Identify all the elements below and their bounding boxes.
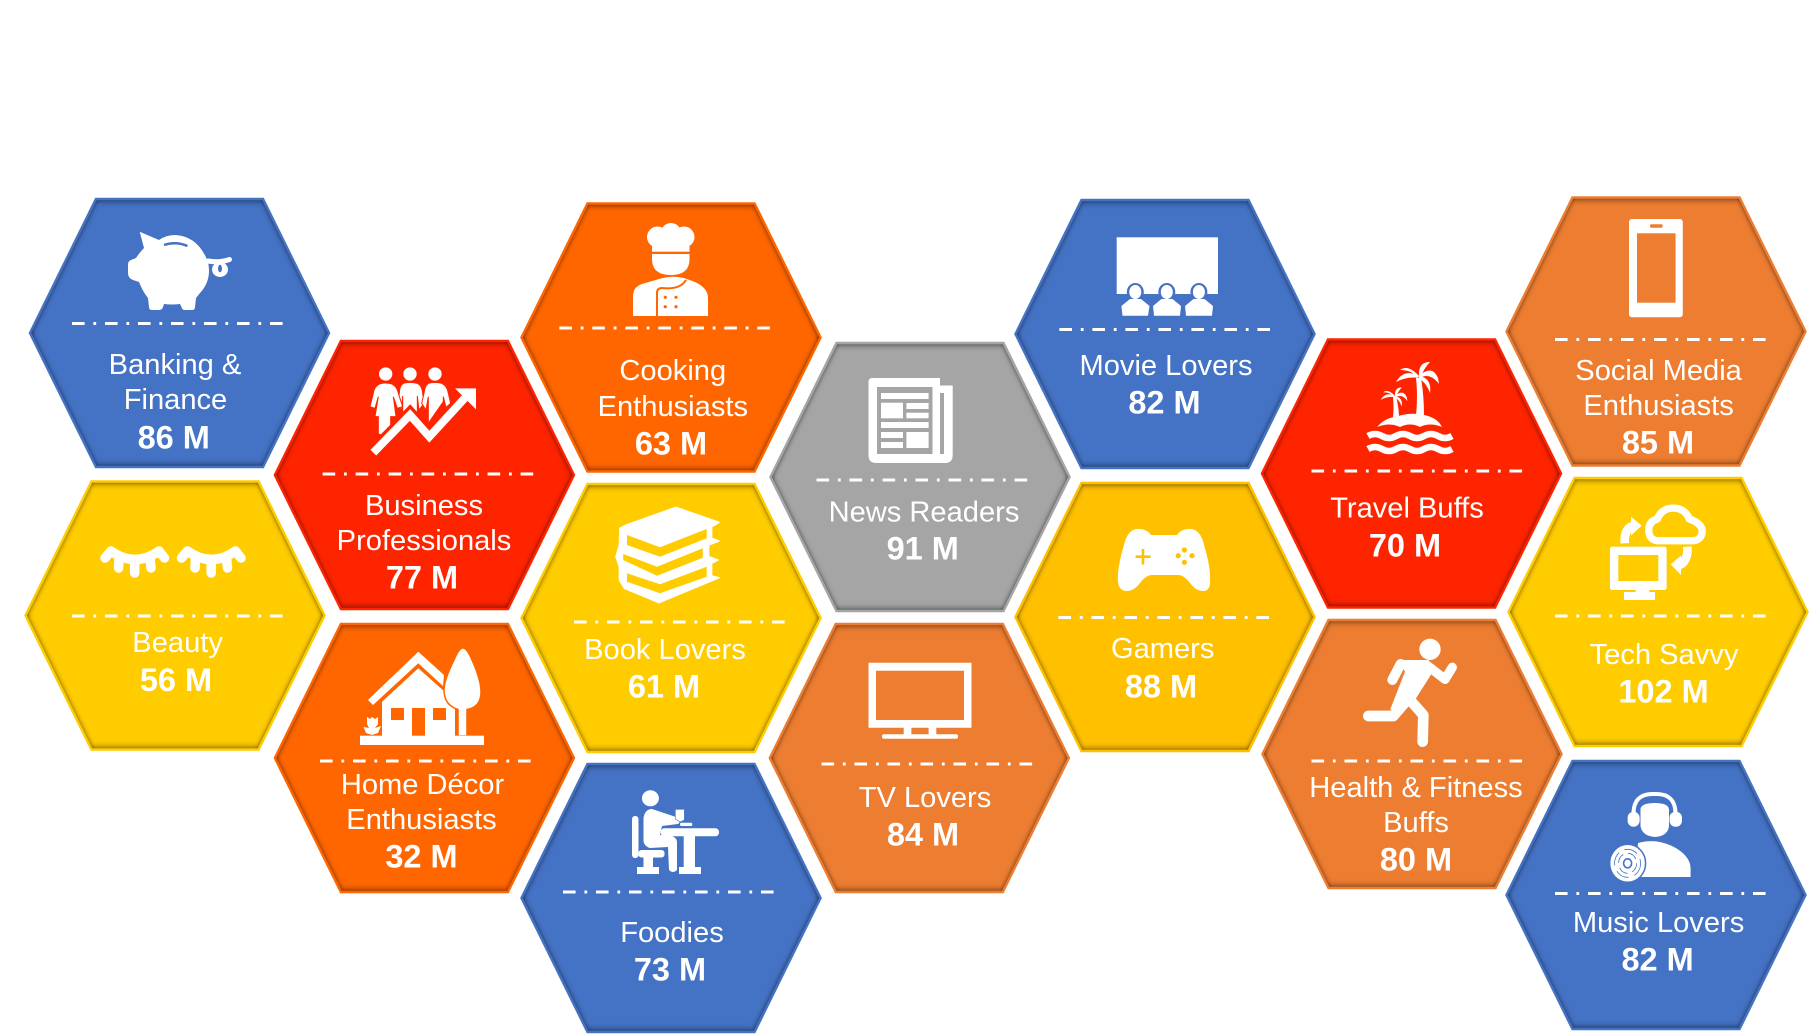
panel: Banking & Finance [30,199,329,467]
icon: piggy bank [128,232,230,310]
icon: newspaper [868,378,953,463]
value: 102 M [1618,674,1709,710]
icon: people with rising arrow [370,367,476,453]
panel: Music Lovers [1506,761,1806,1029]
label: Travel Buffs [1330,492,1484,524]
label: Beauty [132,627,223,659]
panel: Gamers [1016,483,1314,751]
label: Cooking [619,355,726,387]
value: 86 M [138,420,210,456]
hexagon: grey [770,343,1070,611]
panel: News Readers [770,343,1070,611]
panel: TV Lovers [770,624,1069,892]
panel: Health & Fitness Buffs [1262,620,1562,888]
value: 61 M [628,668,700,704]
hexagon: light orange [1262,620,1562,888]
hexagon: amber [1016,483,1314,751]
label line 2: Finance [124,384,227,416]
label: News Readers [829,497,1019,529]
icon: runner [1368,639,1452,742]
hexagon: orange [522,204,820,472]
value: 85 M [1622,424,1694,460]
label: Music Lovers [1573,907,1744,939]
panel: Book Lovers [522,484,820,752]
panel: Tech Savvy [1508,478,1808,746]
label line 2: Enthusiasts [598,391,748,423]
label: TV Lovers [859,782,991,814]
label: Book Lovers [584,634,746,666]
panel: Business Professionals [275,341,574,609]
value: 84 M [887,816,959,852]
hexagon: orange [275,624,574,892]
value: 63 M [635,426,707,462]
hexagon: red [1262,340,1561,608]
icon: chef [633,223,708,316]
panel: Social Media Enthusiasts [1506,198,1806,466]
icon: computer and cloud sync [1610,508,1702,600]
label: Tech Savvy [1590,639,1739,671]
value: 73 M [634,952,706,988]
panel: Cooking Enthusiasts [522,204,820,472]
icon: smartphone [1629,219,1683,317]
panel: Beauty [26,482,324,750]
hexagon: yellow [522,484,820,752]
hexagon: light orange [1506,198,1806,466]
panel: Home Decor Enthusiasts [275,624,574,892]
hexagon: blue [1016,200,1314,468]
hexagon: blue [522,764,820,1032]
hexagon: red [275,341,574,609]
label: Social Media [1575,355,1743,387]
hexagon: blue [30,199,329,467]
label: Business [365,490,483,522]
hexagon: light orange [770,624,1069,892]
hexagon: yellow [1508,478,1808,746]
icon: listener with headphones and record [1610,794,1691,882]
label line 2: Professionals [337,525,511,557]
value: 82 M [1128,384,1201,420]
value: 91 M [887,530,959,566]
value: 82 M [1621,942,1694,978]
label: Foodies [620,917,724,949]
label: Health & Fitness [1309,772,1523,804]
hexagon: yellow [26,482,324,750]
icon: stack of books [616,507,719,603]
icon: person at table [632,790,719,874]
icon: palm island [1368,362,1452,451]
value: 88 M [1125,668,1197,704]
label: Gamers [1111,633,1214,665]
value: 77 M [386,560,458,596]
hexagon: blue [1506,761,1806,1029]
label line 2: Enthusiasts [346,804,497,836]
icon: game controller [1118,529,1210,591]
value: 70 M [1369,528,1441,564]
icon: television [868,663,972,739]
panel: Movie Lovers [1016,200,1314,468]
panel: Travel Buffs [1262,340,1561,608]
label: Banking & [109,349,241,381]
value: 56 M [140,662,212,698]
label: Home Décor [341,769,504,801]
icon: cinema screen and audience [1117,237,1218,316]
label line 2: Enthusiasts [1583,390,1734,422]
value: 32 M [385,838,458,874]
icon: house and tree [360,648,484,745]
icon: eyelashes [105,551,241,573]
label line 2: Buffs [1383,807,1449,839]
value: 80 M [1380,842,1452,878]
label: Movie Lovers [1079,350,1253,382]
panel: Foodies [522,764,820,1032]
